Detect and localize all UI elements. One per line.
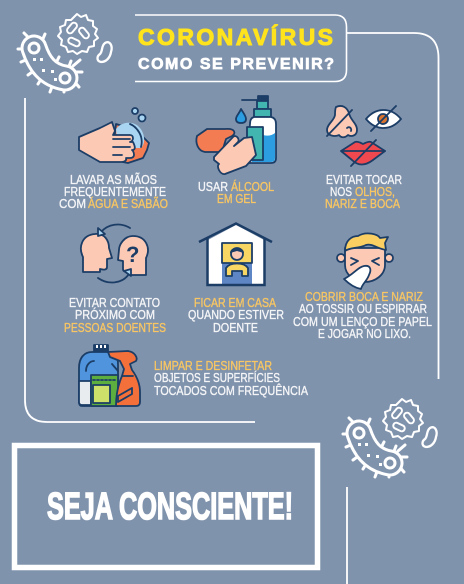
label: limpar e desinfetar: TOCADOS COM FREQUÊNCIA [154, 383, 308, 398]
label: cobrir boca e nariz: E JOGAR NO LIXO. [318, 326, 411, 341]
label: evitar tocar: EVITAR TOCAR [326, 172, 402, 187]
label: álcool em gel [198, 179, 274, 206]
label: ficar em casa: QUANDO ESTIVER [188, 307, 284, 322]
label: evitar contato: PESSOAS DOENTES [64, 320, 166, 335]
label: cobrir boca e nariz: AO TOSSIR OU ESPIRRAR [299, 301, 427, 316]
label: álcool em gel: ÁLCOOL [231, 179, 274, 194]
panel: lavar as mãos [59, 108, 168, 211]
label: limpar e desinfetar: LIMPAR E DESINFETAR [154, 358, 272, 373]
label: lavar as mãos: COM [59, 196, 86, 211]
label: cobrir boca e nariz: COM UM LENÇO DE PAPEL [293, 314, 432, 329]
label: lavar as mãos: ÁGUA E SABÃO [88, 196, 168, 211]
title: coronavírus: CORONAVÍRUS [138, 23, 333, 50]
label: cobrir boca e nariz [293, 289, 432, 341]
title box [135, 15, 346, 82]
label: limpar e desinfetar [154, 358, 308, 398]
label: lavar as mãos: LAVAR AS MÃOS [70, 172, 157, 187]
panel: limpar e desinfetar [79, 345, 308, 406]
callout text: SEJA CONSCIENTE! [47, 486, 293, 528]
panel: ficar em casa [188, 224, 284, 335]
label: evitar contato: PRÓXIMO COM [75, 307, 155, 322]
icon: washing hands [79, 108, 149, 163]
label: limpar e desinfetar: OBJETOS E SUPERFÍCIES [154, 370, 280, 385]
icon: cleaning products [79, 345, 140, 406]
icon: sneezing face with tissue [337, 233, 393, 289]
label: evitar contato [64, 295, 166, 335]
icon: two heads with arrows: ? [126, 242, 139, 267]
label: ficar em casa: DOENTE [213, 320, 258, 335]
icon: nose eye mouth crossed [327, 106, 401, 166]
label: lavar as mãos [59, 172, 168, 211]
label: evitar tocar: OLHOS, [355, 184, 395, 199]
label: cobrir boca e nariz: COBRIR BOCA E NARIZ [305, 289, 423, 304]
icon: germs bottom [343, 399, 437, 477]
label: evitar tocar [325, 172, 402, 211]
icon: house with person in bed [199, 224, 272, 285]
panel: cobrir boca e nariz [293, 233, 432, 341]
label: ficar em casa: FICAR EM CASA [194, 295, 276, 310]
label: lavar as mãos: FREQUENTEMENTE [64, 184, 166, 199]
label: álcool em gel: USAR [198, 179, 228, 194]
panel: álcool em gel [196, 96, 276, 206]
panel: evitar tocar [325, 106, 402, 211]
label: evitar tocar: NOS [330, 184, 352, 199]
label: evitar tocar: NARIZ E BOCA [325, 196, 400, 211]
panel: evitar contato [64, 225, 166, 335]
icon: hand sanitizer [196, 96, 276, 174]
label: evitar contato: EVITAR CONTATO [69, 295, 160, 310]
label: álcool em gel: EM GEL [217, 191, 256, 206]
callout: seja consciente [14, 446, 318, 568]
subtitle: como se prevenir: COMO SE PREVENIR? [138, 56, 334, 73]
icon: germs top [18, 14, 112, 92]
label: ficar em casa [188, 295, 284, 335]
